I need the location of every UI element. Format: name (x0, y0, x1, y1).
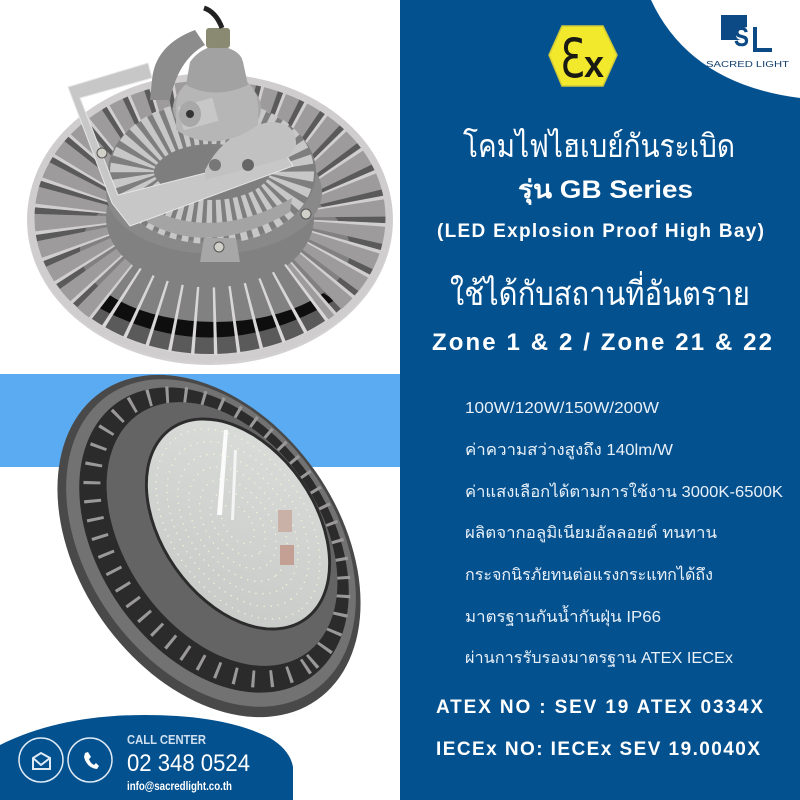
title: series: รุ่น GB Series (518, 176, 693, 206)
heading: hazardous locations: ใช้ได้กับสถานที่อันตราย (450, 271, 750, 312)
feature list: ค่าแสงเลือกได้ตามการใช้งาน 3000K-6500K (465, 482, 783, 501)
hub (173, 76, 261, 140)
feature list: 100W/120W/150W/200W (465, 400, 660, 417)
icon: Ex explosion proof mark (549, 26, 617, 90)
panel: light blue band (0, 374, 400, 467)
feature list: มาตรฐานกันน้ำกันฝุ่น IP66 (465, 605, 661, 627)
certificate number: IECEx: IECEx NO: IECEx SEV 19.0040X (436, 739, 760, 760)
icon: Ex explosion proof mark: Ɛ (560, 27, 585, 90)
panel: blue information panel (400, 0, 800, 800)
icon: mail (19, 738, 63, 782)
feature list: ผลิตจากอลูมิเนียมอัลลอยด์ ทนทาน (465, 523, 717, 543)
subtitle: English product name: (LED Explosion Proof High Bay) (437, 221, 764, 242)
certificate number: ATEX: ATEX NO : SEV 19 ATEX 0334X (436, 697, 763, 718)
feature list: กระจกนิรภัยทนต่อแรงกระแทกได้ถึง (465, 565, 713, 584)
logo: Sacred Light (651, 0, 800, 98)
LED dots (122, 399, 354, 649)
bracket (68, 63, 293, 226)
logo: Sacred Light: SACRED LIGHT (706, 59, 789, 69)
footer contact banner (0, 715, 293, 800)
product photo: high bay lamp, top view (27, 8, 393, 365)
title: Thai product name: โคมไฟไฮเบย์กันระเบิด (463, 128, 735, 164)
broad upper fins (70, 110, 350, 294)
phone number: 02 348 0524 (127, 750, 250, 777)
icon: phone (68, 738, 112, 782)
call center label: CALL CENTER (127, 733, 206, 747)
feature list (465, 400, 783, 667)
icon: Ex explosion proof mark: x (584, 44, 604, 86)
heading: zones: Zone 1 & 2 / Zone 21 & 22 (432, 329, 772, 356)
product photo: high bay lamp, underside view (0, 317, 423, 775)
inner heat sink (106, 130, 322, 254)
feature list: ผ่านการรับรองมาตรฐาน ATEX IECEx (465, 650, 733, 667)
feature list: ค่าความสว่างสูงถึง 140lm/W (465, 442, 674, 460)
thin lower fins (111, 294, 309, 325)
email: info@sacredlight.co.th (127, 781, 232, 793)
logo: Sacred Light: S (734, 22, 749, 52)
